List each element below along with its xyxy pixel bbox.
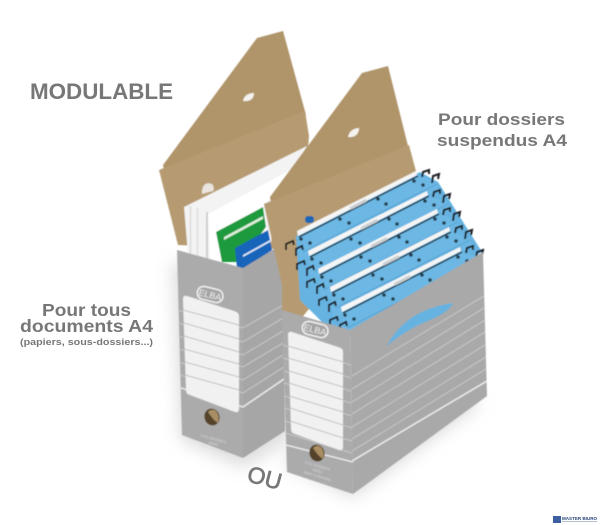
hanging file 3: [307, 208, 460, 300]
green folder: [216, 207, 266, 262]
right box reference text: Made in Germany: [303, 470, 331, 482]
right box with hanging files: [264, 66, 487, 494]
left box right side: [243, 243, 285, 458]
right box label area: [288, 332, 343, 450]
left box lower flap: [159, 111, 309, 250]
left box upper flap: [163, 31, 306, 175]
right box reference text: CYG 100333374: [304, 461, 330, 472]
blue hanging files base: [296, 172, 482, 332]
left box stripes: [178, 305, 284, 393]
left box finger hole: [202, 407, 222, 427]
stack of white papers: [184, 146, 307, 262]
left box front: [177, 250, 243, 458]
hanging file 1: [286, 170, 439, 262]
label: ou: OU: [245, 461, 285, 495]
right box reference text: 83452: [312, 468, 323, 474]
right box ELBA logo: ELBA: [303, 322, 327, 338]
left lower flap notch: [202, 183, 214, 194]
right box side stripes: [352, 296, 486, 451]
left box with A4 documents: [159, 31, 309, 458]
right box upper flap: [270, 66, 409, 207]
blue folder: [235, 230, 272, 270]
hanging file 5: [330, 246, 483, 338]
label: pour tous documents A4: documents A4: [20, 316, 153, 336]
right box front: [282, 310, 353, 494]
left box reference text: Made in Germany: [199, 443, 227, 455]
label: pour dossiers suspendus A4: [437, 110, 568, 150]
left box label area: [183, 296, 239, 412]
heading: modulable: MODULABLE: [30, 79, 173, 104]
right box front stripes: [283, 345, 353, 462]
right box finger hole: [307, 443, 327, 463]
right box side: [350, 252, 487, 494]
left flap hole: [243, 93, 254, 101]
logo: master biuro: [553, 516, 598, 523]
blue tab behind files: [305, 216, 314, 223]
left box ELBA logo: ELBA: [198, 287, 222, 303]
box shadows: [172, 260, 480, 498]
blue handle cutout: [387, 303, 453, 346]
right box lower flap: [264, 145, 417, 320]
label: pour dossiers suspendus A4: suspendus A4: [437, 131, 568, 150]
right flap hole: [348, 128, 359, 137]
left box reference text: 83452: [208, 441, 219, 447]
left box reference text: CYG 100333374: [200, 434, 226, 445]
label: pour tous documents A4: [20, 300, 153, 348]
hanging file 4: [319, 226, 472, 318]
hanging file 2: [297, 190, 450, 282]
label: pour dossiers suspendus A4: Pour dossiers: [438, 110, 565, 129]
label: pour tous documents A4: Pour tous: [42, 300, 131, 320]
label: pour tous documents A4: (papiers, sous-dossiers...): [20, 337, 153, 348]
right box reference text: [303, 461, 331, 482]
logo: master biuro: MASTER BIURO: [562, 516, 598, 521]
left box reference text: [199, 434, 227, 455]
